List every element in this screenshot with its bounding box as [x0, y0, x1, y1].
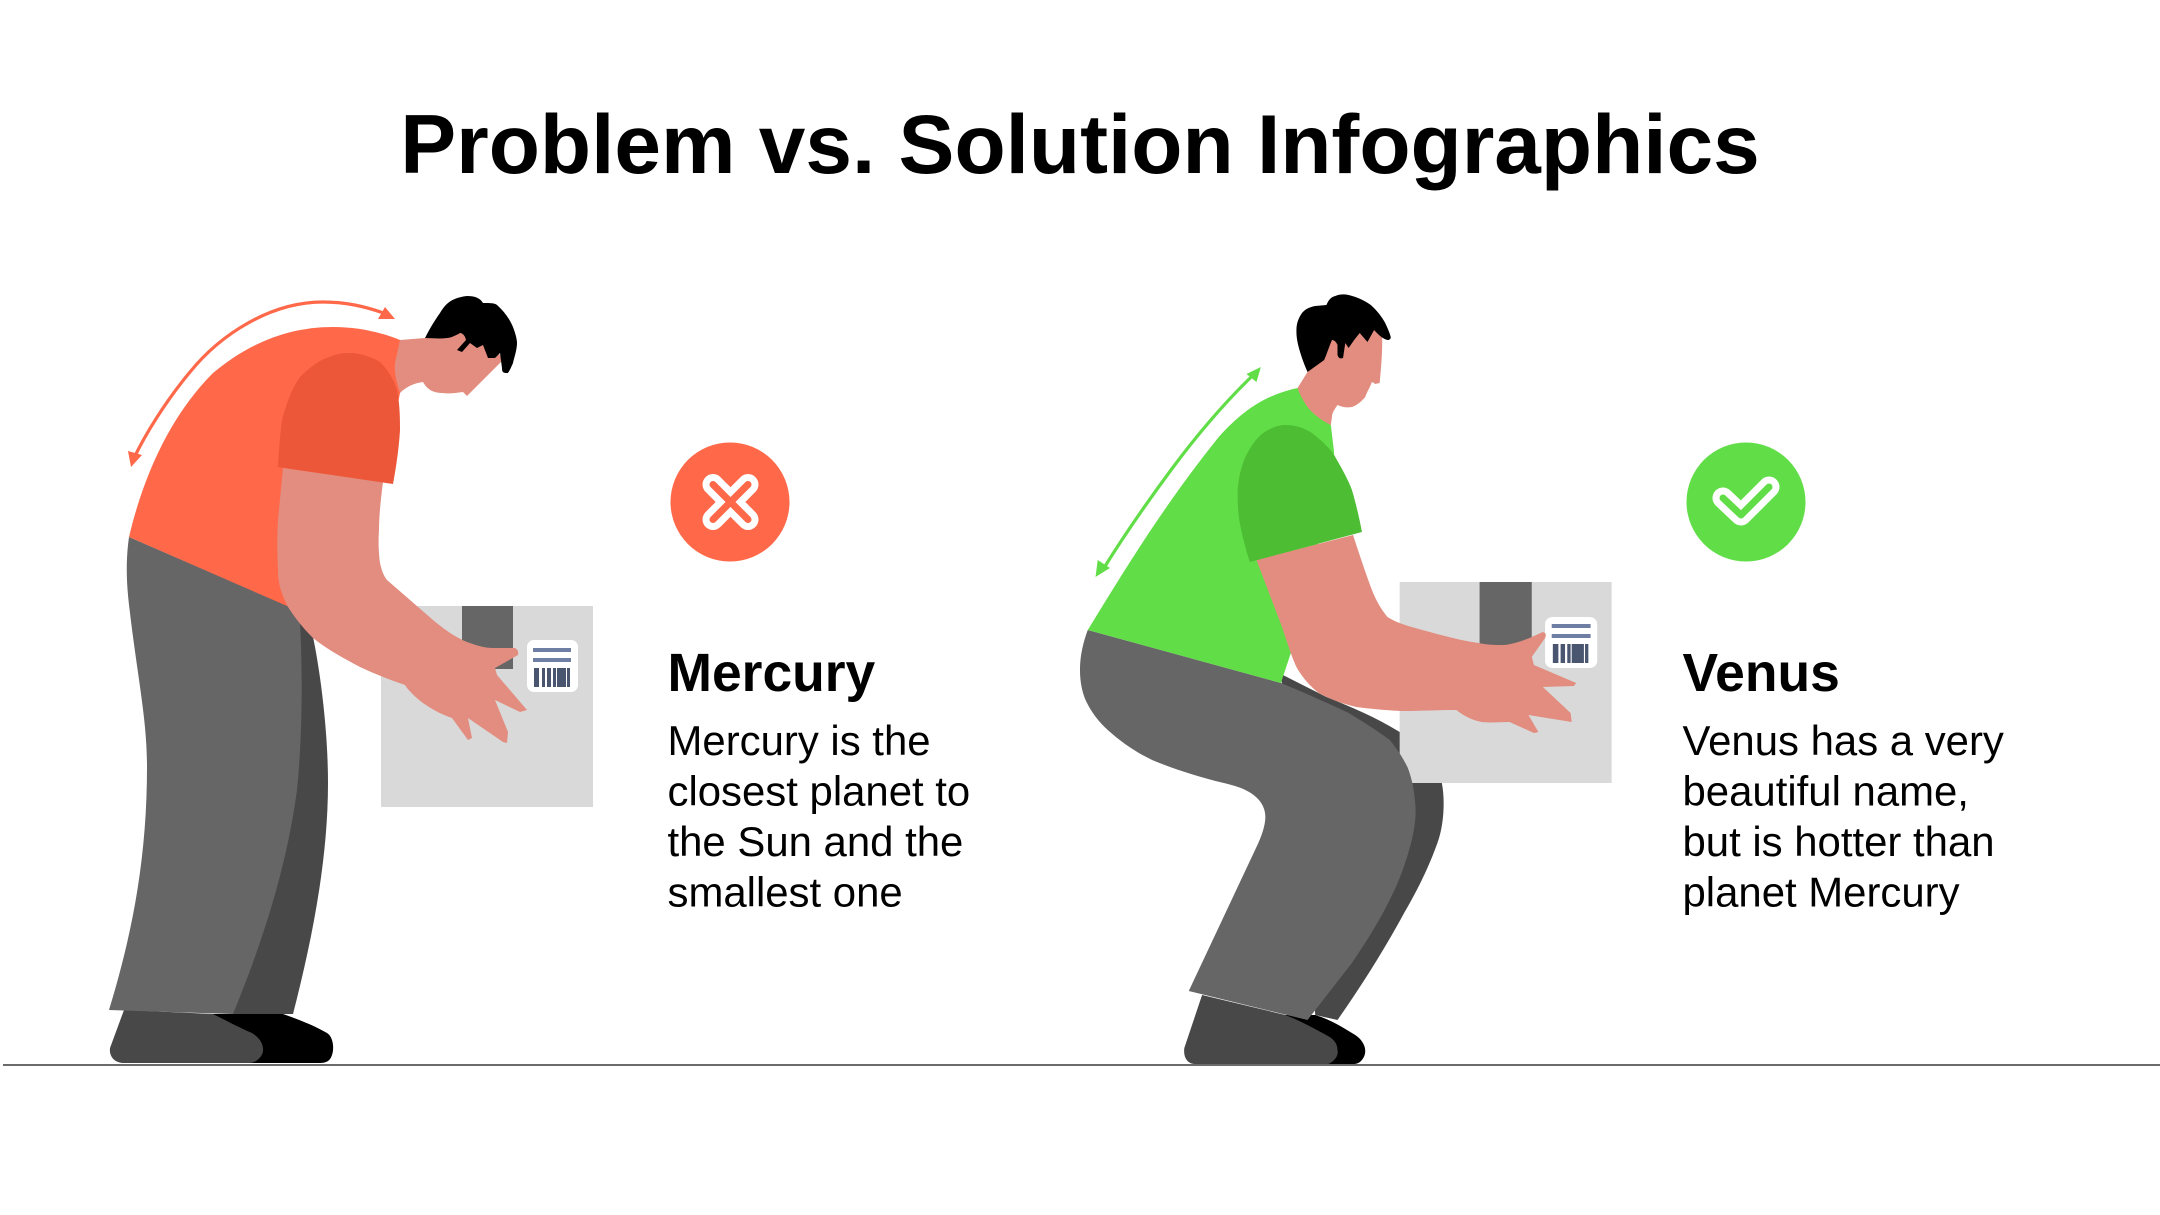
- back shoe: [193, 1014, 333, 1063]
- text block: Mercury: the Sun and the: [668, 818, 963, 865]
- text block: Venus: Venus: [1682, 644, 1840, 703]
- curved double arrow: [128, 302, 395, 467]
- text block: Mercury: [668, 644, 970, 916]
- hair: [425, 296, 517, 373]
- title: Problem vs. Solution Infographics: [400, 97, 1760, 191]
- text block: Venus: Venus has a very: [1682, 717, 2004, 764]
- front shoe: [110, 1010, 263, 1063]
- double arrow: [1096, 367, 1261, 577]
- front shoe: [1184, 995, 1338, 1064]
- hair: [1296, 294, 1391, 372]
- sleeve: [1238, 425, 1362, 562]
- ground line: [3, 1064, 2160, 1066]
- head and neck: [1298, 310, 1382, 425]
- text block: Venus: beautiful name,: [1682, 768, 1969, 814]
- box: [381, 606, 593, 807]
- figure: solution, squat lift: [1080, 294, 1612, 1064]
- back leg: [1281, 674, 1444, 1020]
- back shoe: [1285, 1015, 1365, 1064]
- shirt: [129, 327, 400, 606]
- icon: check in green circle: [1686, 442, 1806, 562]
- text block: Mercury: Mercury is the: [668, 717, 931, 764]
- text block: Venus: but is hotter than: [1682, 818, 1995, 865]
- figure: problem, bent-back lift: [109, 296, 593, 1063]
- text block: Mercury: Mercury: [668, 644, 876, 703]
- arm and hand: [1256, 535, 1576, 733]
- icon: cross in red circle: [670, 442, 790, 562]
- shirt: [1088, 388, 1334, 683]
- text block: Mercury: smallest one: [668, 868, 903, 916]
- back leg: [233, 620, 328, 1014]
- arm and hand: [277, 468, 527, 743]
- head and neck: [395, 300, 503, 396]
- text block: Mercury: closest planet to: [668, 768, 970, 814]
- text block: Venus: [1682, 644, 2004, 916]
- box: [1400, 582, 1612, 783]
- text block: Venus: planet Mercury: [1682, 868, 1960, 916]
- front leg: [109, 537, 302, 1014]
- sleeve: [278, 353, 400, 484]
- front leg: [1080, 630, 1416, 1020]
